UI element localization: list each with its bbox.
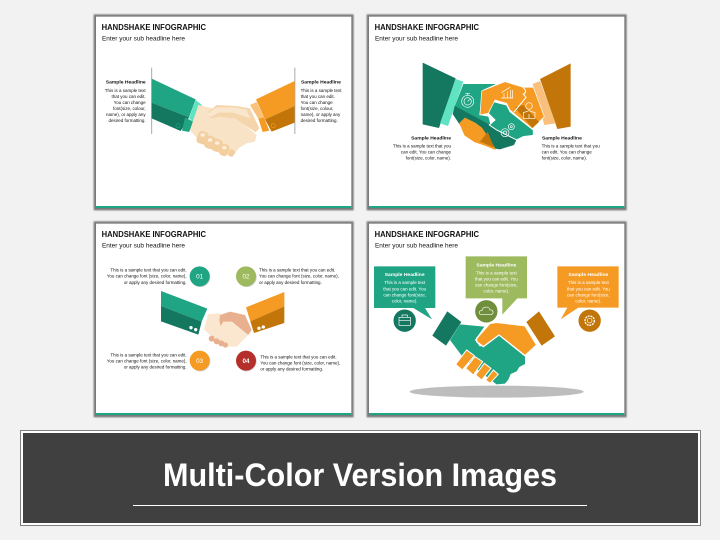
right text block: font(size, color, name). (542, 156, 587, 161)
callout: green (466, 256, 527, 315)
teal hand (450, 324, 525, 384)
title: HANDSHAKE INFOGRAPHIC (102, 229, 206, 239)
item 04: 04 (242, 358, 250, 365)
left text block: This is a sample text that you (393, 144, 452, 149)
left cuff (432, 311, 461, 346)
right text block: that you can edit. (301, 94, 335, 99)
callout: teal: Sample Headline (385, 272, 425, 278)
right text block: This is a sample text that you (542, 144, 600, 149)
item 02: or apply any desired formatting. (259, 280, 322, 285)
handshake hands (190, 105, 259, 157)
slide 1: two sleeves handshake (94, 14, 354, 210)
right cuff (533, 63, 571, 129)
item 01: You can change font (size, color, name), (107, 274, 187, 279)
right text block: name), or apply any (301, 112, 341, 117)
title: HANDSHAKE INFOGRAPHIC (375, 229, 479, 239)
callout: green: color, name). (483, 289, 509, 294)
item 01: 01 (196, 274, 204, 281)
right text block (294, 68, 342, 134)
icon: gears (501, 124, 514, 137)
right cuff (526, 311, 555, 346)
callout: teal: color, name). (392, 298, 418, 303)
callout: orange: Sample Headline (568, 272, 609, 278)
item 02: You can change font (size, color, name), (259, 274, 339, 279)
right sleeve (250, 81, 295, 132)
left text block: font(size, colour, (113, 106, 146, 111)
orange fingers (456, 350, 498, 383)
icon: briefcase (393, 309, 416, 332)
teal hand upper with dark band (453, 84, 533, 149)
left text block (105, 68, 152, 134)
shadow ellipse (410, 386, 584, 398)
slide 3: numbered handshake (94, 221, 354, 417)
item 03 (107, 351, 210, 371)
item 01 (107, 266, 210, 287)
item 04 (236, 351, 340, 372)
callout: teal: This is a sample text (384, 280, 426, 285)
left text block: Sample Headline (106, 80, 146, 86)
right sleeve (246, 292, 284, 333)
callout: green: This is a sample text (476, 271, 518, 276)
slide 2: puzzle handshake (367, 14, 627, 210)
subtitle: Enter your sub headline here (102, 243, 185, 250)
icon: gear (578, 309, 601, 332)
callout: orange: that you can edit. You (567, 286, 610, 291)
subtitle: Enter your sub headline here (102, 36, 185, 43)
right text block (542, 135, 600, 161)
banner heading: Multi-Color Version Images (163, 457, 557, 493)
right text block: can edit. You can change (542, 150, 592, 155)
handshake hands (204, 312, 252, 348)
left text block: name), or apply any (106, 112, 146, 117)
callout: teal (374, 266, 435, 319)
callout: teal: can change font(size, (383, 292, 426, 297)
left text block: You can change (114, 100, 146, 105)
left sleeve (161, 291, 207, 335)
left text block: desired formatting. (109, 118, 146, 123)
right text block: Sample Headline (542, 135, 582, 141)
left sleeve (152, 79, 202, 132)
callout: teal: that you can edit. You (383, 286, 427, 291)
item 02: This is a sample text that you can edit. (259, 268, 335, 273)
right text block: This is a sample text (301, 88, 342, 93)
left text block (393, 135, 452, 161)
item 04: or apply any desired formatting. (260, 367, 323, 372)
left text block: can edit. You can change (401, 150, 451, 155)
item 03: 03 (196, 358, 204, 365)
left text block: font(size, color, name). (406, 156, 451, 161)
callout: orange (557, 266, 619, 319)
item 03: You can change font (size, color, name), (107, 358, 187, 363)
orange fingers (460, 118, 495, 149)
right text block: You can change (301, 100, 333, 105)
item 04: This is a sample text that you can edit. (260, 354, 337, 359)
callout: orange: This is a sample text (568, 280, 610, 285)
title: HANDSHAKE INFOGRAPHIC (102, 22, 206, 32)
right text block: font(size, colour, (301, 106, 333, 111)
icon: bar chart (501, 87, 513, 98)
icon: person (523, 103, 535, 118)
item 02: 02 (242, 274, 250, 281)
title: HANDSHAKE INFOGRAPHIC (375, 22, 479, 32)
left text block: This is a sample text (105, 88, 146, 93)
callout: green: can change font(size, (475, 283, 518, 288)
subtitle: Enter your sub headline here (375, 36, 458, 43)
right text block: desired formatting. (301, 118, 338, 123)
left cuff (423, 63, 463, 128)
callout: green: that you can edit. You (475, 277, 518, 282)
item 01: or apply any desired formatting. (124, 280, 187, 285)
right text block: Sample Headline (301, 80, 341, 86)
icon: cloud (475, 300, 498, 323)
orange hand (480, 82, 544, 129)
orange hand (477, 322, 537, 356)
item 03: This is a sample text that you can edit. (110, 352, 187, 357)
icon: stopwatch (462, 93, 474, 107)
left text block: Sample Headline (411, 135, 451, 141)
item 03: or apply any desired formatting. (124, 365, 187, 370)
item 01: This is a sample text that you can edit. (110, 268, 187, 273)
left text block: that you can edit. (112, 94, 146, 99)
callout: green: Sample Headline (476, 262, 517, 268)
banner (20, 430, 701, 526)
subtitle: Enter your sub headline here (375, 243, 458, 250)
slide 4: callout handshake (367, 221, 627, 417)
item 02 (236, 266, 339, 287)
callout: orange: color, name). (575, 298, 601, 303)
callout: orange: can change font(size, (567, 292, 610, 297)
item 04: You can change font (size, color, name), (260, 360, 340, 365)
